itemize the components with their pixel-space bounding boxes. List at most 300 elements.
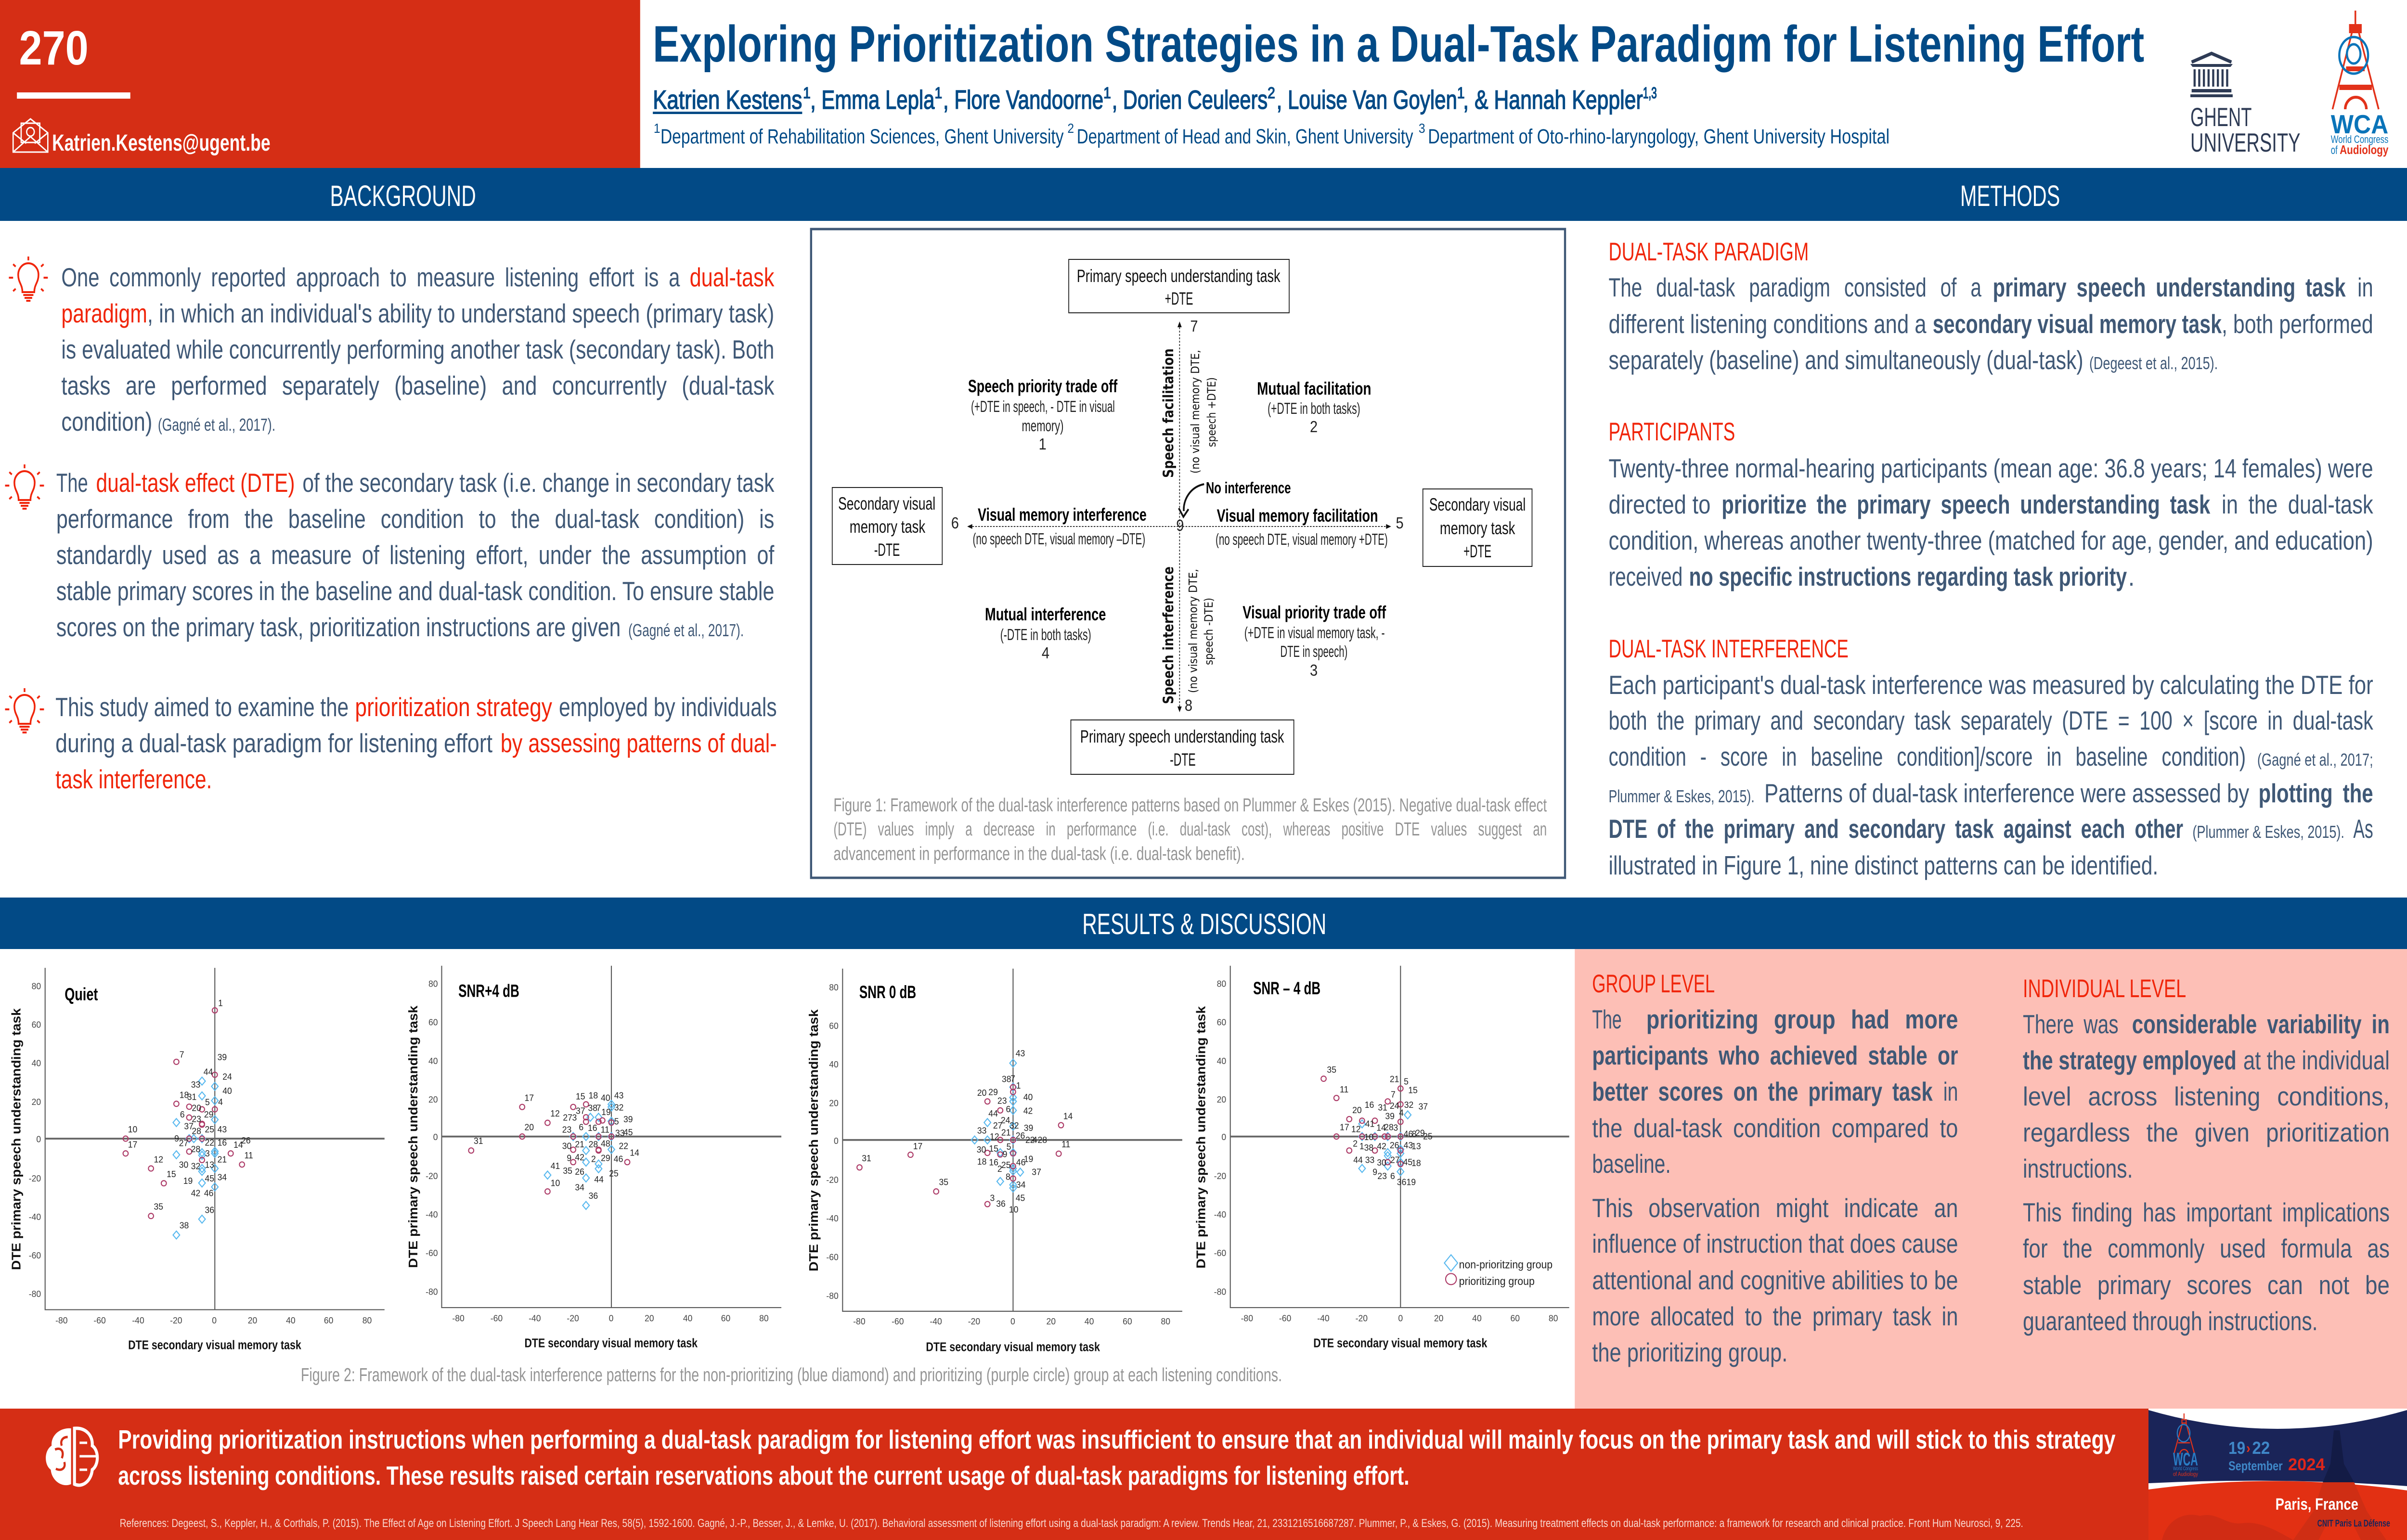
chart: scatter plot SNR 0 dB: 7: [1010, 1074, 1015, 1084]
authors: 2: [1268, 85, 1275, 102]
chart: scatter plot SNR+4 dB: 6: [579, 1122, 583, 1132]
small WCA logo: WCA: [2173, 1449, 2198, 1469]
block: group level: prioritizing group had more: [1646, 1004, 1958, 1034]
chart: scatter plot SNR 0 dB: 4: [1033, 1135, 1037, 1145]
chart: scatter plot SNR -4 dB: 27: [1390, 1155, 1400, 1165]
chart: scatter plot quiet: 39: [218, 1052, 227, 1062]
congress location: Paris, France: [2276, 1495, 2358, 1513]
icon: light bulb 1: [9, 257, 48, 301]
framework labels: Speech priority trade off: [968, 376, 1117, 396]
chart: scatter plot quiet: 33: [191, 1080, 200, 1090]
block: participants: [1609, 417, 2373, 591]
chart: scatter plot SNR -4 dB: 20: [1217, 1095, 1226, 1104]
chart: scatter plot SNR+4 dB: 18: [589, 1091, 598, 1101]
framework labels: 4: [1042, 644, 1049, 662]
chart: scatter plot SNR -4 dB: 80: [1217, 979, 1226, 989]
chart: scatter plot quiet: DTE primary speech understanding task: [10, 1008, 24, 1270]
chart: scatter plot SNR 0 dB: 20: [1046, 1317, 1056, 1326]
chart: scatter plot SNR 0 dB: 28: [1038, 1135, 1047, 1145]
chart: scatter plot quiet: 9: [174, 1134, 179, 1143]
block: dual-task interference: (Plummer & Eskes, 2015).: [2192, 822, 2344, 842]
panel: background text: [5, 257, 777, 794]
chart: scatter plot SNR+4 dB: 48: [601, 1139, 610, 1149]
framework labels: 8: [1185, 696, 1192, 714]
block: group level: better scores on the primary task: [1592, 1077, 1933, 1106]
framework labels: (+DTE in visual memory task, -: [1244, 624, 1385, 642]
chart: scatter plot SNR+4 dB: 80: [428, 979, 438, 989]
section header band: results and discussion: RESULTS & DISCUSSION: [1082, 908, 1326, 941]
chart: scatter plot SNR 0 dB: 18: [977, 1157, 986, 1167]
block: dual-task paradigm: separately (baseline) and simultaneously (dual-task): [1609, 345, 2083, 375]
chart: scatter plot SNR -4 dB: -20: [1214, 1171, 1226, 1181]
chart legend: prioritizing group: [1459, 1275, 1535, 1287]
chart: scatter plot SNR -4 dB: 44: [1353, 1155, 1363, 1165]
paragraph: dual-task effect: standardly used as a measure of listening effort, under the assumption of: [56, 540, 775, 570]
chart: scatter plot quiet: 29: [204, 1110, 214, 1119]
framework labels: 7: [1190, 317, 1198, 335]
authors: , Flore Vandoorne: [943, 85, 1103, 115]
block: participants: .: [2128, 562, 2135, 591]
framework labels: (+DTE in speech, - DTE in visual: [971, 398, 1115, 415]
block: group level: participants who achieved stable or: [1592, 1040, 1958, 1070]
chart: scatter plot quiet: 16: [218, 1138, 227, 1147]
block: dual-task paradigm: (Degeest et al., 2015).: [2089, 354, 2218, 373]
chart: scatter plot SNR 0 dB: 15: [989, 1144, 998, 1154]
chart: scatter plot SNR 0 dB: 80: [1161, 1317, 1170, 1326]
chart legend: non-prioritzing group: [1459, 1258, 1553, 1270]
panel: figure 1 framework: [811, 229, 1565, 878]
framework labels: 3: [1310, 661, 1318, 679]
chart: scatter plot quiet: 3: [205, 1149, 210, 1158]
framework labels: Visual memory interference: [978, 505, 1147, 525]
chart: scatter plot quiet: 6: [180, 1110, 185, 1119]
chart: scatter plot quiet: 36: [205, 1205, 214, 1215]
framework labels: (no visual memory DTE,: [1188, 350, 1202, 474]
icon: email envelope: [13, 119, 48, 152]
chart: scatter plot SNR 0 dB: 2: [997, 1164, 1002, 1174]
affiliations: 3: [1419, 121, 1425, 136]
congress location: CNIT Paris La Défense: [2317, 1518, 2390, 1528]
chart: scatter plot SNR 0 dB: 43: [1016, 1049, 1025, 1058]
framework labels: 2: [1310, 418, 1318, 436]
chart: scatter plot SNR -4 dB: 23: [1377, 1171, 1387, 1181]
box: primary speech -DTE: -DTE: [1170, 750, 1196, 770]
block: group level: the prioritizing group.: [1592, 1337, 1787, 1367]
chart: scatter plot SNR+4 dB: 0: [433, 1132, 438, 1142]
chart: scatter plot SNR 0 dB: -20: [968, 1317, 980, 1326]
block: group level: in: [1943, 1077, 1958, 1106]
chart: scatter plot quiet: 38: [180, 1220, 189, 1231]
chart: scatter plot SNR+4 dB: 11: [601, 1125, 609, 1134]
block: individual level: INDIVIDUAL LEVEL: [2023, 974, 2186, 1003]
chart: scatter plot SNR -4 dB: 42: [1377, 1142, 1386, 1151]
chart: scatter plot SNR -4 dB: 38: [1364, 1143, 1373, 1153]
chart: scatter plot SNR 0 dB: 38: [1002, 1074, 1011, 1084]
box: primary speech -DTE: [1071, 720, 1294, 774]
paragraph: dual-task effect: stable primary scores in the baseline and dual-task condition. To ensure stable: [56, 576, 774, 606]
chart: scatter plot SNR -4 dB: 15: [1408, 1085, 1418, 1095]
chart: scatter plot quiet: 7: [180, 1050, 184, 1060]
chart: scatter plot SNR 0 dB: 40: [829, 1060, 839, 1069]
paragraph: dual-task paradigm: , in which an individual's ability to understand speech (primary task): [147, 298, 774, 328]
paragraph: dual-task effect: dual-task effect (DTE): [96, 468, 295, 498]
framework labels: Mutual facilitation: [1257, 379, 1371, 398]
chart: scatter plot SNR+4 dB: 80: [759, 1313, 769, 1323]
chart: scatter plot quiet: -20: [29, 1174, 41, 1183]
chart: scatter plot quiet: 42: [191, 1188, 200, 1198]
chart: scatter plot quiet: -80: [55, 1316, 68, 1325]
chart: scatter plot SNR+4 dB: 22: [619, 1141, 628, 1151]
chart: scatter plot SNR 0 dB: [808, 969, 1182, 1354]
chart: scatter plot SNR 0 dB: 10: [1009, 1205, 1019, 1215]
chart: scatter plot SNR+4 dB: -60: [491, 1313, 503, 1323]
box: primary speech +DTE: +DTE: [1165, 289, 1193, 308]
paragraph: study aim: This study aimed to examine the: [55, 692, 349, 722]
chart: scatter plot SNR 0 dB: 45: [1016, 1193, 1025, 1203]
authors: , & Hannah Keppler: [1463, 85, 1643, 115]
chart: scatter plot quiet: 11: [244, 1151, 253, 1160]
congress dates: [2228, 1438, 2325, 1474]
paragraph: dual-task effect: The: [56, 468, 88, 498]
chart: scatter plot quiet: 40: [222, 1086, 232, 1096]
authors: Katrien Kestens: [653, 85, 802, 115]
logo: World Congress of Audiology: Audiology: [2340, 143, 2389, 157]
block: individual level: guaranteed through instructions.: [2023, 1306, 2318, 1336]
chart: scatter plot SNR 0 dB: -40: [826, 1214, 839, 1223]
chart: scatter plot SNR -4 dB: -40: [1317, 1313, 1330, 1323]
chart: scatter plot SNR+4 dB: 20: [645, 1313, 654, 1323]
panel: congress banner image: [2148, 1409, 2407, 1540]
chart: scatter plot SNR 0 dB: 21: [1001, 1128, 1011, 1137]
authors: [653, 85, 1657, 115]
box: secondary visual -DTE: memory task: [850, 517, 926, 537]
chart: scatter plot SNR+4 dB: 60: [428, 1017, 438, 1027]
box: primary speech -DTE: Primary speech understanding task: [1080, 727, 1284, 746]
chart: scatter plot SNR 0 dB: 46: [1016, 1157, 1025, 1167]
icon: light bulb 3: [5, 688, 44, 732]
paragraph: dual-task paradigm: condition): [61, 407, 152, 436]
chart: scatter plot SNR -4 dB: [1195, 966, 1569, 1350]
logo: World Congress of Audiology: World Congress: [2331, 134, 2388, 145]
chart: scatter plot SNR 0 dB: DTE primary speech understanding task: [808, 1009, 821, 1271]
chart: scatter plot quiet: 0: [36, 1134, 41, 1144]
block: dual-task interference: As: [2353, 814, 2373, 844]
box: secondary visual +DTE: [1423, 489, 1532, 566]
chart: scatter plot quiet: 34: [218, 1172, 227, 1182]
chart: scatter plot SNR+4 dB: 23: [562, 1125, 571, 1134]
chart: scatter plot SNR -4 dB: 26: [1390, 1141, 1399, 1150]
heading: methods: METHODS: [1960, 180, 2060, 213]
chart: scatter plot SNR 0 dB: 27: [993, 1121, 1003, 1130]
chart: scatter plot quiet: 43: [218, 1125, 227, 1134]
icon: light bulb 2: [5, 464, 44, 509]
chart: scatter plot SNR 0 dB: 31: [862, 1154, 871, 1163]
chart: scatter plot SNR+4 dB: 25: [609, 1168, 619, 1179]
chart: scatter plot SNR+4 dB: -20: [426, 1171, 438, 1181]
chart: scatter plot SNR 0 dB: 29: [988, 1087, 998, 1097]
chart: scatter plot SNR+4 dB: 40: [683, 1313, 693, 1323]
block: participants: in the dual-task: [2222, 489, 2373, 519]
block: dual-task paradigm: in: [2357, 272, 2373, 302]
block: group level: baseline.: [1592, 1149, 1671, 1179]
affiliations: Department of Head and Skin, Ghent University: [1077, 125, 1413, 148]
authors: , Dorien Ceuleers: [1112, 85, 1268, 115]
block: group level: the dual-task condition compared to: [1592, 1113, 1958, 1143]
chart: scatter plot SNR+4 dB: 33: [615, 1128, 625, 1138]
chart: scatter plot SNR -4 dB: 2: [1353, 1139, 1358, 1149]
chart: scatter plot SNR+4 dB: 14: [630, 1148, 639, 1158]
chart: scatter plot SNR -4 dB: 60: [1217, 1017, 1226, 1027]
chart: scatter plot SNR -4 dB: 0: [1398, 1313, 1403, 1323]
chart: scatter plot quiet: 40: [286, 1316, 296, 1325]
chart: scatter plot SNR+4 dB: DTE secondary visual memory task: [524, 1336, 698, 1350]
chart: scatter plot SNR 0 dB: 20: [829, 1098, 839, 1108]
chart: scatter plot SNR -4 dB: 13: [1411, 1142, 1421, 1151]
paragraph: dual-task effect: scores on the primary task, prioritization instructions are given: [56, 612, 621, 642]
chart: scatter plot SNR -4 dB: 17: [1340, 1122, 1349, 1132]
chart: scatter plot SNR 0 dB: 23: [997, 1096, 1007, 1106]
chart: scatter plot SNR 0 dB: 40: [1085, 1317, 1094, 1326]
chart: scatter plot SNR 0 dB: 5: [1007, 1142, 1011, 1152]
chart: scatter plot SNR -4 dB: -80: [1241, 1313, 1253, 1323]
chart: scatter plot quiet: -20: [170, 1316, 182, 1325]
figure 1 caption: [833, 795, 1547, 864]
block: dual-task interference: illustrated in Figure 1, nine distinct patterns can be identified.: [1609, 850, 2158, 880]
chart: scatter plot SNR+4 dB: 2: [591, 1154, 596, 1164]
chart: scatter plot quiet: Quiet: [65, 984, 98, 1004]
chart: scatter plot quiet: 35: [154, 1202, 163, 1212]
paragraph: dual-task effect: (Gagné et al., 2017).: [628, 621, 744, 640]
affiliations: 2: [1067, 121, 1074, 136]
chart: scatter plot SNR+4 dB: 9: [567, 1153, 571, 1163]
chart legend: [1444, 1255, 1553, 1287]
chart: scatter plot SNR -4 dB: 31: [1378, 1103, 1387, 1112]
framework labels: (no speech DTE, visual memory –DTE): [973, 530, 1145, 548]
chart: scatter plot SNR+4 dB: 31: [474, 1136, 483, 1146]
chart: scatter plot quiet: 80: [362, 1316, 372, 1325]
chart: scatter plot SNR -4 dB: 36: [1397, 1177, 1406, 1187]
chart: scatter plot SNR 0 dB: -20: [826, 1175, 839, 1185]
figure 1 caption: Figure 1: Framework of the dual-task interference patterns based on Plummer & Eskes (2015). Negative dual-task effect: [833, 795, 1547, 815]
box: secondary visual +DTE: Secondary visual: [1429, 495, 1526, 514]
chart: scatter plot SNR+4 dB: 20: [524, 1122, 534, 1132]
paragraph: dual-task effect: performance from the baseline condition to the dual-task condition) is: [56, 504, 774, 534]
chart: scatter plot SNR 0 dB: -60: [826, 1252, 839, 1262]
chart: scatter plot SNR -4 dB: 10: [1364, 1132, 1373, 1142]
chart: scatter plot SNR 0 dB: 8: [1006, 1172, 1010, 1182]
chart: scatter plot SNR+4 dB: 26: [575, 1167, 584, 1177]
chart: scatter plot SNR -4 dB: 29: [1415, 1128, 1425, 1138]
chart: scatter plot SNR 0 dB: 25: [1001, 1160, 1011, 1170]
chart: scatter plot quiet: 10: [128, 1125, 137, 1134]
chart: scatter plot SNR -4 dB: 43: [1404, 1141, 1413, 1150]
chart: scatter plot SNR -4 dB: 30: [1377, 1158, 1386, 1168]
block: group level: influence of instruction that does cause: [1592, 1229, 1958, 1258]
authors: 1,3: [1643, 85, 1657, 102]
box: secondary visual -DTE: -DTE: [874, 540, 900, 560]
chart: scatter plot quiet: 31: [187, 1092, 196, 1102]
Eiffel tower and trees silhouette, red: [2293, 1482, 2386, 1540]
chart: scatter plot SNR+4 dB: 36: [589, 1191, 598, 1201]
chart: scatter plot quiet: 80: [32, 981, 41, 991]
chart: scatter plot quiet: 22: [205, 1138, 214, 1147]
chart: scatter plot quiet: 24: [222, 1072, 232, 1082]
chart: scatter plot SNR+4 dB: 0: [609, 1313, 613, 1323]
box: primary speech +DTE: Primary speech understanding task: [1077, 266, 1281, 286]
chart: scatter plot SNR 0 dB: 33: [977, 1126, 986, 1136]
paragraph: study aim: employed by individuals: [559, 692, 777, 722]
congress dates: ›: [2246, 1439, 2251, 1456]
paragraph: dual-task paradigm: [61, 262, 774, 436]
arrow: no interference pointer: [1179, 484, 1204, 517]
block: dual-task paradigm: [1609, 237, 2373, 375]
congress dates: 22: [2252, 1438, 2270, 1458]
chart: scatter plot SNR 0 dB: 9: [1003, 1149, 1007, 1159]
chart: scatter plot SNR+4 dB: -20: [567, 1313, 579, 1323]
chart: scatter plot quiet: 0: [212, 1316, 217, 1325]
chart: scatter plot quiet: -40: [29, 1212, 41, 1222]
block: participants: directed to: [1609, 489, 1710, 519]
chart: scatter plot SNR 0 dB: 40: [1023, 1092, 1033, 1102]
chart: scatter plot SNR 0 dB: 14: [1063, 1111, 1073, 1121]
block: participants: PARTICIPANTS: [1609, 417, 1735, 446]
panel: conclusion banner: [0, 1409, 2148, 1540]
chart: scatter plot SNR 0 dB: 30: [977, 1145, 986, 1155]
framework labels: Visual priority trade off: [1242, 603, 1386, 622]
chart: scatter plot SNR+4 dB: 44: [594, 1175, 604, 1184]
framework labels: (+DTE in both tasks): [1268, 399, 1360, 417]
references: References: Degeest, S., Keppler, H., & Corthals, P. (2015). The Effect of Age on Listening Effort. J Speech Lang Hear Res, 58(5), 1592-1600. Gagné, J.-P., Besser, J., & Lemke, U. (2017). Behavioral assessment of listening effort using a dual-task paradigm: A review. Trends Hear, 21, 2331216516687287. Plummer, P., & Eskes, G. (2015). Measuring treatment effects on dual-task performance: a framework for research and clinical practice. Front Hum Neurosci, 9, 225.: [120, 1517, 2023, 1529]
paragraph: study aim: during a dual-task paradigm for listening effort: [55, 728, 492, 758]
conclusion text: across listening conditions. These results raised certain reservations about the current usage of dual-task paradigms for listening effort.: [118, 1461, 1410, 1490]
paragraph: dual-task effect: of the secondary task (i.e. change in secondary task: [302, 468, 774, 498]
email address: Katrien.Kestens@ugent.be: [52, 129, 271, 156]
block: individual level: level across listening conditions,: [2023, 1081, 2390, 1111]
chart: scatter plot SNR+4 dB: 12: [550, 1109, 560, 1118]
framework labels: memory): [1022, 417, 1064, 435]
chart: scatter plot SNR -4 dB: 8: [1412, 1129, 1417, 1139]
authors: 1: [1103, 85, 1111, 102]
paragraph: dual-task paradigm: is evaluated while concurrently performing another task (secondary task). Both: [61, 334, 774, 364]
congress dates: September: [2228, 1459, 2283, 1473]
block: group level: The: [1592, 1004, 1622, 1034]
chart: scatter plot SNR+4 dB: 7: [596, 1103, 601, 1113]
block: participants: received: [1609, 562, 1682, 591]
chart: scatter plot SNR+4 dB: 21: [575, 1140, 584, 1149]
framework labels: Speech facilitation: [1161, 348, 1177, 478]
framework labels: 1: [1039, 435, 1047, 453]
chart: scatter plot SNR+4 dB: [407, 966, 781, 1350]
chart: scatter plot SNR 0 dB: -80: [826, 1291, 839, 1301]
chart: scatter plot SNR+4 dB: -60: [426, 1248, 438, 1258]
chart: scatter plot SNR 0 dB: 24: [1001, 1116, 1010, 1125]
figure 1 caption: advancement in performance in the dual-task (i.e. dual-task benefit).: [833, 843, 1245, 864]
chart: scatter plot SNR 0 dB: 3: [990, 1193, 995, 1203]
affiliations: 1: [654, 121, 660, 136]
chart: scatter plot SNR -4 dB: 19: [1407, 1177, 1416, 1187]
block: participants: prioritize the primary speech understanding task: [1721, 489, 2210, 519]
chart: scatter plot quiet: 28: [192, 1126, 201, 1136]
chart: scatter plot quiet: 23: [192, 1114, 201, 1124]
chart: scatter plot SNR -4 dB: SNR – 4 dB: [1253, 978, 1320, 998]
chart: scatter plot SNR 0 dB: DTE secondary visual memory task: [926, 1340, 1100, 1354]
chart: scatter plot SNR -4 dB: 28: [1384, 1122, 1394, 1132]
chart: scatter plot SNR 0 dB: 0: [1010, 1317, 1015, 1326]
authors: 1: [934, 85, 942, 102]
logo: Ghent University: GHENT: [2190, 102, 2252, 132]
chart: scatter plot SNR+4 dB: 41: [551, 1161, 560, 1171]
chart: scatter plot SNR+4 dB: 27: [563, 1113, 572, 1123]
chart: scatter plot SNR -4 dB: 40: [1217, 1056, 1226, 1066]
authors: , Louise Van Goylen: [1277, 85, 1457, 115]
block: dual-task interference: DTE of the primary and secondary task against each other: [1609, 814, 2183, 844]
chart: scatter plot SNR 0 dB: 0: [834, 1136, 839, 1146]
affiliations: Department of Oto-rhino-laryngology, Ghent University Hospital: [1428, 125, 1889, 148]
section header band: background and methods: [0, 168, 2407, 221]
chart: scatter plot quiet: 45: [205, 1174, 214, 1183]
chart: scatter plot SNR+4 dB: 3: [572, 1113, 577, 1123]
chart: scatter plot quiet: 1: [218, 998, 223, 1008]
chart: scatter plot SNR 0 dB: 60: [829, 1021, 839, 1031]
framework labels: 6: [951, 514, 959, 532]
panel: methods text: [1609, 237, 2373, 880]
chart: scatter plot quiet: -80: [29, 1289, 41, 1299]
chart: scatter plot SNR+4 dB: 60: [721, 1313, 730, 1323]
chart: scatter plot quiet: -60: [29, 1251, 41, 1260]
box: primary speech +DTE: [1069, 259, 1289, 313]
chart: scatter plot SNR 0 dB: 37: [1032, 1167, 1041, 1177]
chart: scatter plot SNR+4 dB: 39: [623, 1115, 633, 1124]
small WCA logo: of Audiology: [2173, 1471, 2198, 1477]
box: secondary visual +DTE: memory task: [1440, 518, 1515, 538]
chart: scatter plot quiet: 27: [179, 1138, 188, 1148]
chart: scatter plot SNR 0 dB: 20: [977, 1088, 986, 1098]
chart: scatter plot SNR+4 dB: 45: [623, 1128, 633, 1137]
panel: poster id and contact: [0, 0, 640, 168]
panel: group and individual level: [1575, 949, 2407, 1409]
chart: scatter plot SNR+4 dB: 40: [428, 1056, 438, 1066]
chart: scatter plot SNR+4 dB: 37: [576, 1106, 585, 1116]
chart: scatter plot SNR -4 dB: -40: [1214, 1210, 1226, 1219]
block: individual level: regardless the given prioritization: [2023, 1117, 2390, 1147]
block: individual level: instructions.: [2023, 1154, 2133, 1183]
chart: scatter plot SNR+4 dB: 19: [601, 1107, 611, 1117]
chart: scatter plot quiet: -60: [93, 1316, 106, 1325]
chart: scatter plot quiet: 15: [167, 1169, 176, 1179]
chart: scatter plot SNR -4 dB: 7: [1391, 1090, 1396, 1100]
framework labels: DTE in speech): [1281, 642, 1347, 660]
chart: scatter plot SNR+4 dB: 34: [575, 1182, 584, 1193]
block: group level: GROUP LEVEL: [1592, 969, 1715, 998]
chart: scatter plot SNR -4 dB: 40: [1472, 1313, 1482, 1323]
chart: scatter plot SNR -4 dB: 24: [1390, 1101, 1399, 1111]
chart: scatter plot quiet: 40: [32, 1058, 41, 1068]
chart: scatter plot SNR -4 dB: 16: [1365, 1100, 1374, 1110]
chart: scatter plot quiet: 37: [184, 1121, 194, 1131]
chart: scatter plot SNR 0 dB: 17: [913, 1142, 922, 1151]
chart: scatter plot SNR 0 dB: 80: [829, 983, 839, 992]
authors: , Emma Lepla: [810, 85, 935, 115]
block: dual-task interference: DUAL-TASK INTERFERENCE: [1609, 634, 1849, 663]
chart: scatter plot SNR -4 dB: 37: [1419, 1102, 1428, 1112]
box: secondary visual +DTE: +DTE: [1463, 541, 1491, 561]
chart: scatter plot quiet: 44: [204, 1067, 213, 1077]
chart: scatter plot SNR -4 dB: DTE secondary visual memory task: [1313, 1336, 1488, 1350]
chart: scatter plot SNR -4 dB: -20: [1356, 1313, 1368, 1323]
block: dual-task interference: condition - score in baseline condition]/score in baseline condition): [1609, 742, 2246, 771]
chart: scatter plot SNR+4 dB: 46: [614, 1154, 623, 1164]
paragraph: study aim: task interference.: [55, 764, 212, 794]
